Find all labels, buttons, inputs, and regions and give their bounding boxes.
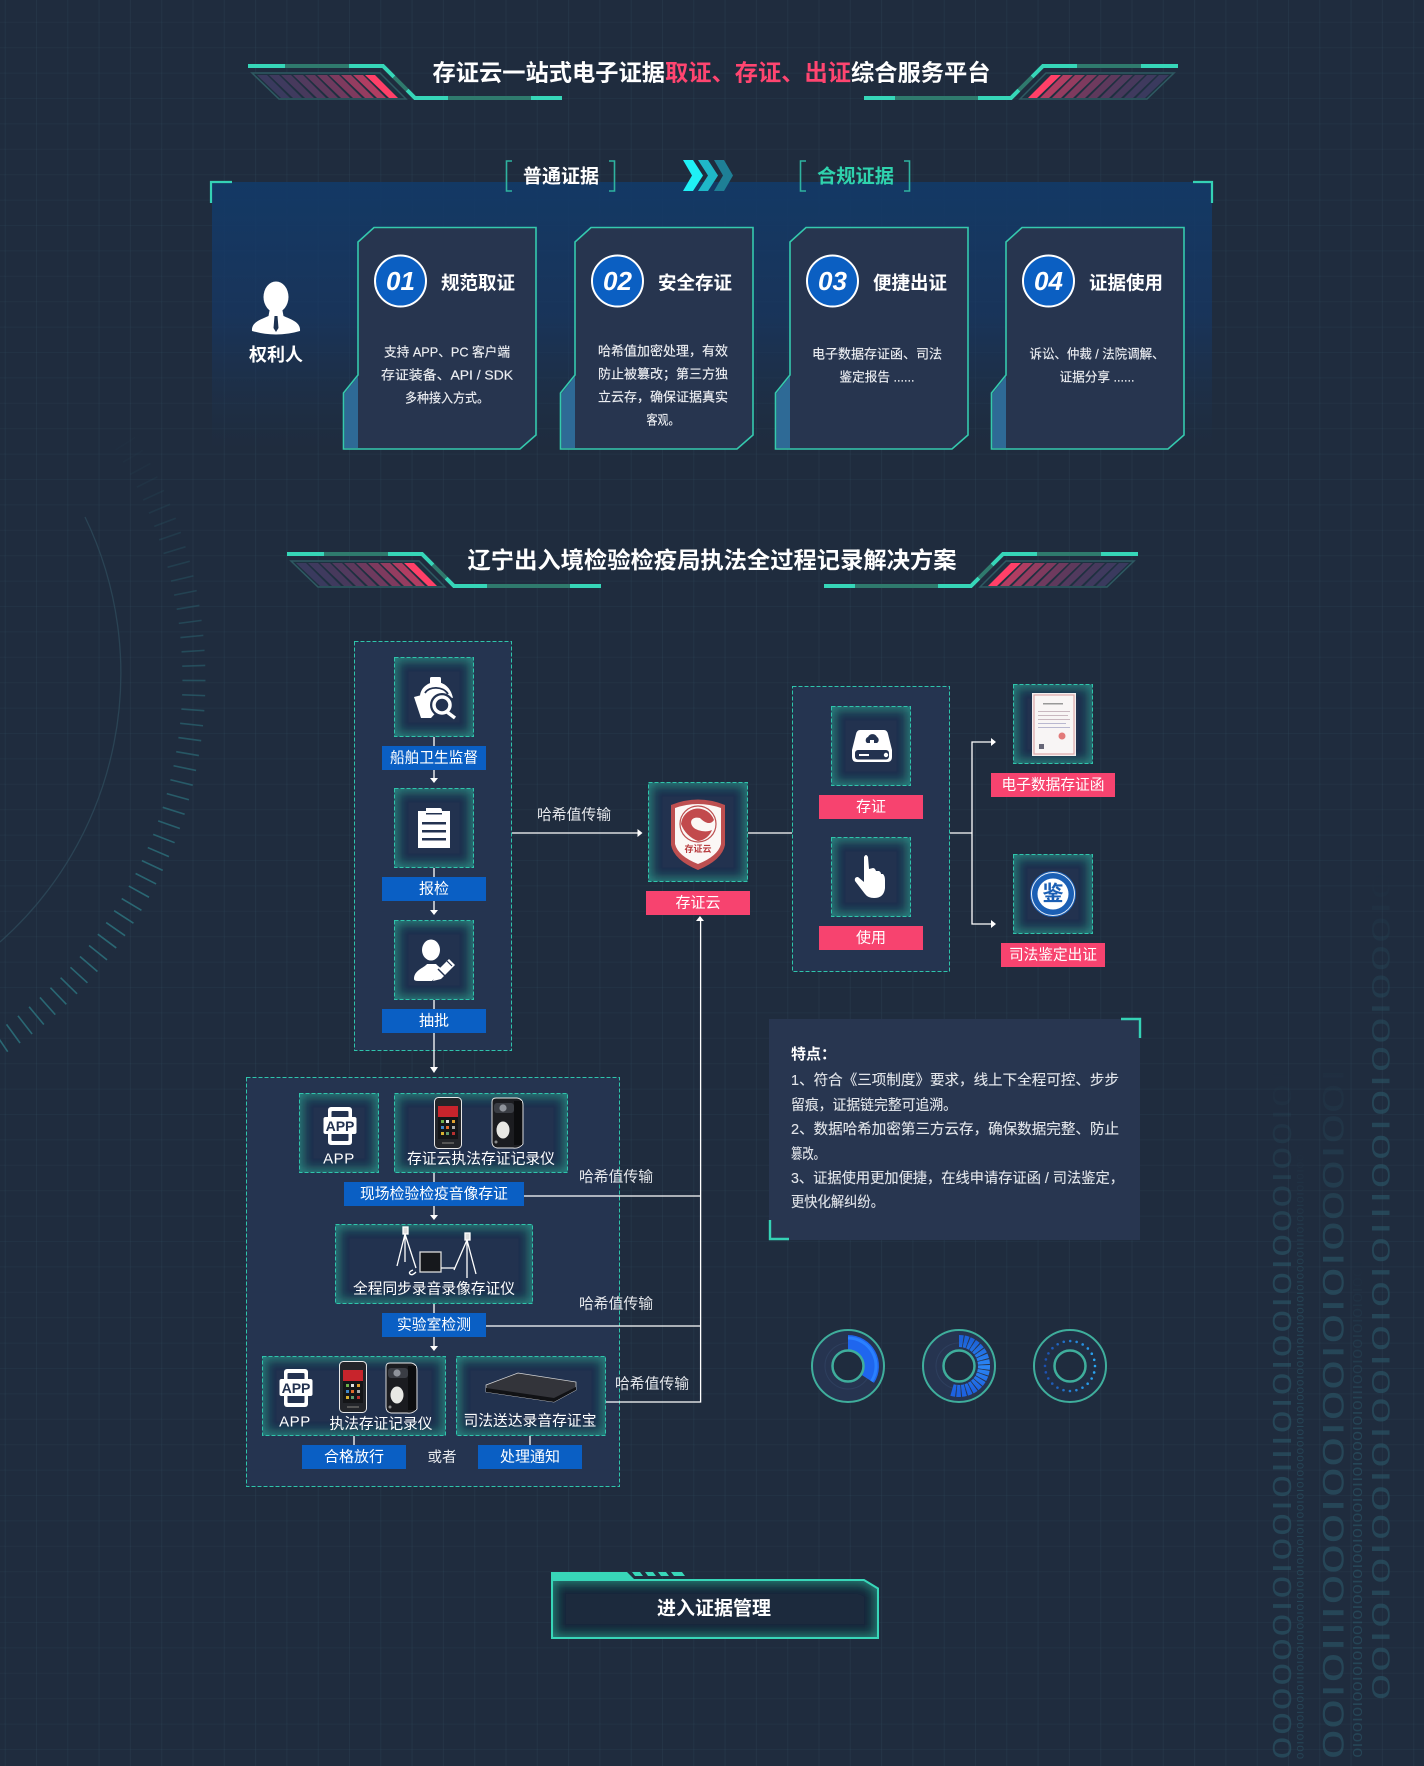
label: 电子数据存证函 xyxy=(1002,776,1104,794)
label: 使用 xyxy=(856,930,886,946)
connector: storage to outputs xyxy=(950,738,996,928)
features list: 更快化解纠纷。 xyxy=(791,1194,884,1211)
card title: 规范取证 xyxy=(441,272,515,294)
connector: process vertical flow xyxy=(354,1173,530,1445)
number badge 02 xyxy=(592,256,643,306)
number badge 01: 01 xyxy=(386,266,415,296)
decorative binary columns on right xyxy=(1267,873,1395,1759)
title text: 辽宁出入境检验检疫局执法全过程记录解决方案 xyxy=(468,547,956,573)
label: 司法送达录音存证宝 xyxy=(464,1412,596,1430)
icon: app: APP xyxy=(282,1380,310,1396)
card description: 多种接入方式。 xyxy=(405,390,489,406)
label: APP xyxy=(323,1150,355,1168)
label: laboratory testing xyxy=(382,1313,486,1337)
button tab ornament xyxy=(551,1572,685,1579)
icon: body camera xyxy=(386,1363,417,1413)
icon: app: APP xyxy=(326,1118,354,1134)
label: 报检 xyxy=(419,880,449,898)
card description xyxy=(1030,346,1164,384)
arrow xyxy=(430,778,438,783)
tab: compliant evidence: 合规证据 xyxy=(817,166,894,188)
arrow: hash transfer to platform xyxy=(512,806,642,837)
decorative binary columns on right: 0I00I0I0I0I00I0IIII0000I0I0I00I0I0I0I00I000I0I0I0I00000I0I0I00II0I00I0I0I0I0I0I00I0I00I0III0I00I00I0I00 xyxy=(1294,1143,1304,1759)
button: enter evidence management xyxy=(551,1572,878,1638)
text: hash transfer: 哈希值传输 xyxy=(579,1168,653,1186)
features heading: 特点： xyxy=(791,1045,836,1063)
decorative binary columns on right: I00I0I0I0I00I00III0I0I000I0II0I00I0I00I0I00I0I00I0I0I00I0I00I0 xyxy=(1350,1262,1364,1758)
gauge: segmented arc dial xyxy=(923,1330,995,1402)
card 01 xyxy=(344,228,536,449)
step: ship hygiene supervision xyxy=(382,658,486,783)
card description: 鉴定报告 ...... xyxy=(840,370,914,384)
output: electronic data certificate xyxy=(991,684,1115,797)
icon: phone recorder xyxy=(340,1362,366,1412)
decorative binary columns on right: II00I000I0I0I00I00I000III0I00 xyxy=(1316,1052,1350,1759)
arrow xyxy=(430,1215,438,1220)
label: rights holder: 权利人 xyxy=(249,345,303,365)
text: or: 或者 xyxy=(428,1449,456,1466)
arrow: steps to on-site panel xyxy=(430,1067,438,1073)
icon: clipboard xyxy=(418,808,450,848)
icon: pointing hand xyxy=(855,855,885,898)
label: release: 合格放行 xyxy=(324,1448,384,1466)
icon: app xyxy=(280,1369,312,1407)
node: judicial delivery box xyxy=(456,1356,606,1436)
label: on-site inspection storage: 现场检验检疫音像存证 xyxy=(360,1186,508,1202)
number badge 01 xyxy=(375,256,426,306)
corner brackets xyxy=(770,1019,1140,1239)
connector: hash transfer back to platform xyxy=(486,916,704,1402)
label: 司法鉴定出证 xyxy=(1009,946,1097,964)
icon: body camera xyxy=(492,1098,523,1148)
tab: ordinary evidence xyxy=(506,161,614,191)
title text: 存证云一站式电子证据取证、存证、出证综合服务平台 xyxy=(432,60,990,86)
output: judicial appraisal xyxy=(1001,854,1105,967)
label: 抽批 xyxy=(419,1012,449,1030)
panel: storage and usage xyxy=(792,686,950,972)
gauge: solid arc dial xyxy=(812,1330,884,1402)
icon: certificate document xyxy=(1032,693,1076,756)
connector: steps vertical flow xyxy=(433,737,435,1069)
label: 全程同步录音录像存证仪 xyxy=(353,1280,515,1298)
number badge 03 xyxy=(807,256,858,306)
panel: inspection steps xyxy=(354,642,512,1069)
button label: 进入证据管理 xyxy=(657,1596,771,1620)
tab: ordinary evidence: 普通证据 xyxy=(523,166,599,188)
label: release xyxy=(302,1445,406,1469)
label: handling notice xyxy=(478,1445,582,1469)
gauge: dotted dial xyxy=(1034,1330,1106,1402)
label: app: APP xyxy=(279,1414,311,1430)
card description: 客观。 xyxy=(646,412,680,428)
panel: four-step process xyxy=(211,160,1212,452)
card title: 证据使用 xyxy=(1089,272,1163,294)
card 04 xyxy=(992,228,1184,449)
arrow xyxy=(430,1346,438,1351)
label: 船舶卫生监督 xyxy=(390,750,478,766)
node: sync recorder xyxy=(336,1224,532,1304)
card description xyxy=(381,344,513,406)
heading: solution title xyxy=(287,547,1138,587)
features list: 2、数据哈希加密第三方云存，确保数据完整、防止 xyxy=(791,1120,1119,1138)
icon: phone recorder xyxy=(434,1098,462,1148)
connector: platform to storage xyxy=(748,832,792,834)
node: enforcement recorders xyxy=(394,1094,568,1172)
node: app and recorders xyxy=(262,1356,446,1436)
icon: ship with magnifier xyxy=(414,677,455,718)
features list: 篡改。 xyxy=(791,1146,825,1163)
panel: features xyxy=(769,1019,1140,1240)
step: sampling approval xyxy=(382,920,486,1033)
arrow: hash transfer to platform: 哈希值传输 xyxy=(537,806,611,824)
number badge 04 xyxy=(1023,256,1074,306)
number badge 03: 03 xyxy=(818,266,847,296)
panel corner brackets xyxy=(211,182,1212,203)
decorative binary columns on right: 0I000I00I0I00III0I0I0I00I0I00I0I0I00 xyxy=(1367,873,1395,1700)
icon: shield logo: 存证云 xyxy=(684,843,712,854)
card description: 诉讼、仲裁 / 法院调解、 xyxy=(1030,346,1164,362)
icon: tripods and laptop xyxy=(397,1227,476,1278)
icon: person xyxy=(252,282,300,334)
node: app xyxy=(300,1094,378,1172)
icon: cloud drive xyxy=(852,730,892,762)
label: 存证 xyxy=(856,798,886,816)
number badge 02: 02 xyxy=(603,266,632,296)
card description: 存证装备、API / SDK xyxy=(381,368,513,382)
decorative arc and tick ring on left xyxy=(0,443,194,1043)
button frame with inner glow xyxy=(552,1580,878,1638)
label: on-site inspection storage xyxy=(344,1182,524,1206)
ornament: right title bracket xyxy=(864,66,1178,99)
blue gradient panel background xyxy=(212,182,1212,452)
node: storage xyxy=(819,706,923,819)
card description: 哈希值加密处理，有效 xyxy=(598,344,728,358)
card title: 便捷出证 xyxy=(873,272,947,294)
label: 存证云 xyxy=(675,894,721,912)
arrow: triple chevron xyxy=(683,160,733,191)
label: recorder: 执法存证记录仪 xyxy=(330,1416,432,1432)
node: usage xyxy=(819,838,923,950)
card title: 安全存证 xyxy=(658,272,732,294)
card description: 防止被篡改；第三方独 xyxy=(598,366,728,382)
card description: 支持 APP、PC 客户端 xyxy=(384,344,510,360)
features list: 1、符合《三项制度》要求，线上下全程可控、步步 xyxy=(791,1071,1119,1089)
card description: 电子数据存证函、司法 xyxy=(812,346,942,362)
heading: platform title xyxy=(248,60,1178,99)
card description: 证据分享 ...... xyxy=(1060,370,1134,384)
features list: 3、证据使用更加便捷，在线申请存证函 / 司法鉴定， xyxy=(791,1170,1124,1187)
features list: 留痕，证据链完整可追溯。 xyxy=(791,1097,957,1114)
ornament: left title bracket xyxy=(287,554,601,587)
label: 存证云执法存证记录仪 xyxy=(407,1150,555,1168)
decorative binary columns on right: I0I00I000I0I00I0I0III0I00I0I000000 xyxy=(1267,1071,1296,1759)
ornament: left title bracket xyxy=(248,66,562,99)
ornament: right title bracket xyxy=(824,554,1138,587)
card description xyxy=(598,344,728,428)
icon: person with pen xyxy=(414,940,455,981)
features list xyxy=(791,1071,1124,1211)
card description xyxy=(812,346,942,384)
text: hash transfer: 哈希值传输 xyxy=(579,1296,653,1312)
label: handling notice: 处理通知 xyxy=(500,1448,560,1466)
card 03 xyxy=(776,228,968,449)
tab: compliant evidence xyxy=(800,161,910,191)
label: laboratory testing: 实验室检测 xyxy=(397,1316,471,1334)
icon: rack device xyxy=(486,1373,576,1402)
card description: 立云存，确保证据真实 xyxy=(598,390,728,404)
card 02 xyxy=(560,228,753,449)
node: evidence cloud xyxy=(646,782,750,915)
rights holder person xyxy=(249,282,303,365)
number badge 04: 04 xyxy=(1034,266,1063,296)
text: hash transfer: 哈希值传输 xyxy=(615,1376,689,1392)
arrow xyxy=(430,910,438,915)
panel: on-site evidence process xyxy=(246,1078,620,1486)
step: inspection report xyxy=(382,788,486,915)
icon: appraisal seal: 鉴 xyxy=(1042,882,1064,906)
